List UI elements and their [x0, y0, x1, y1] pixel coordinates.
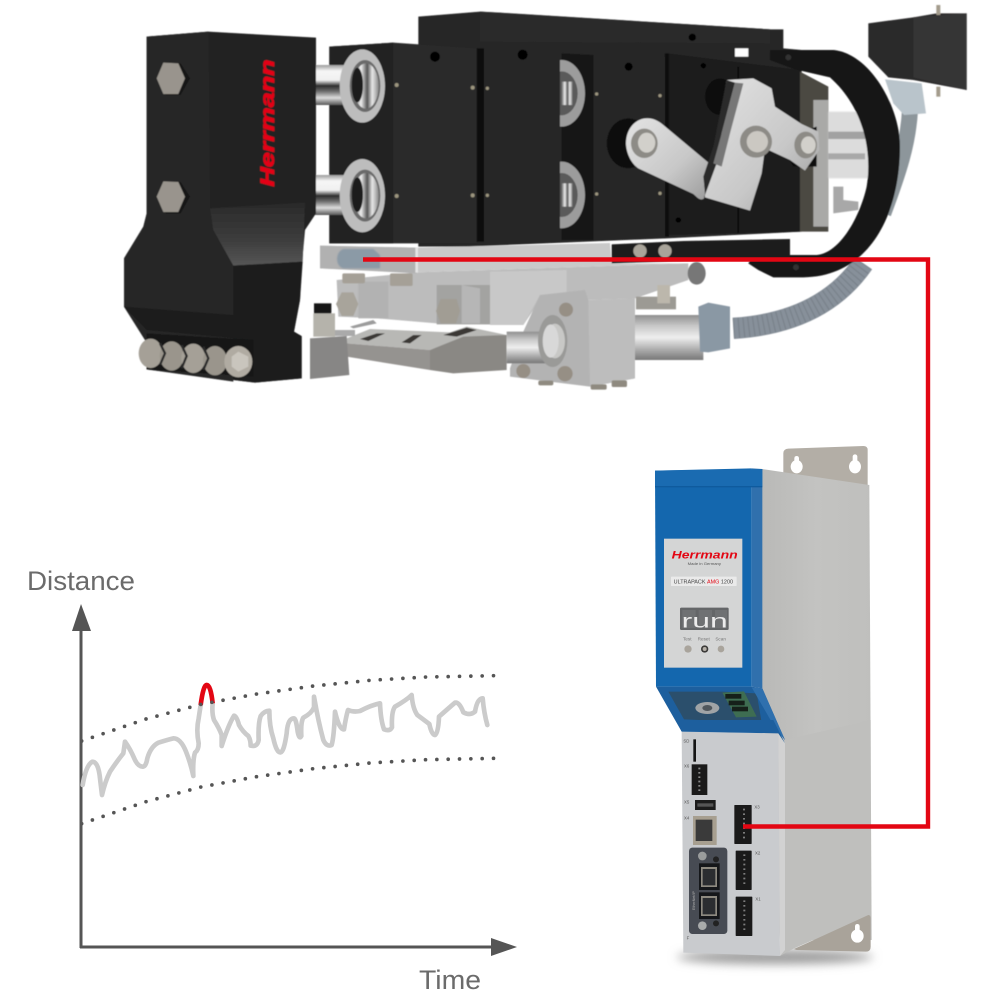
button labels: Test — [683, 637, 692, 642]
bottom bracket — [794, 915, 871, 952]
gray terminal block — [310, 336, 349, 379]
LED display: run — [682, 612, 728, 633]
connector housing — [868, 13, 967, 90]
X3 terminal — [734, 805, 752, 844]
lower tolerance limit — [82, 758, 494, 824]
shaft — [507, 332, 550, 363]
port labels: F — [687, 935, 690, 940]
hex bolts — [158, 63, 190, 95]
port labels — [683, 738, 761, 940]
x axis arrow — [80, 938, 517, 956]
X1 terminal — [736, 897, 752, 936]
top right gray hose — [883, 110, 910, 213]
port labels: X4 — [684, 815, 690, 820]
front mounting block — [124, 32, 316, 383]
blue front cover — [655, 468, 752, 687]
button labels: Scan — [715, 637, 726, 642]
slide assembly (silver) — [310, 239, 790, 390]
port labels: X2 — [755, 851, 761, 856]
clamp jaw — [347, 320, 507, 373]
port labels: X5 — [684, 799, 690, 804]
rear housing and blocks — [418, 5, 967, 328]
top plate — [320, 243, 688, 272]
arm bolts — [631, 129, 658, 158]
X4 Ethernet — [693, 816, 717, 845]
small bolts — [342, 273, 365, 283]
port labels: SD — [683, 738, 689, 743]
swing arm levers — [607, 118, 650, 168]
gray side panel — [762, 469, 872, 940]
key switch — [695, 702, 719, 714]
port labels: X6 — [684, 764, 690, 769]
floor shadow — [677, 950, 873, 964]
red signal line from sensor to controller — [363, 260, 928, 826]
hole in plate — [735, 48, 748, 57]
black cable carrier loop — [748, 50, 900, 277]
row of clamp bolts — [139, 333, 253, 377]
right flange block — [510, 290, 635, 387]
y axis arrow — [72, 604, 91, 948]
port labels: X3 — [754, 804, 760, 809]
controller unit: Ultrapack AMG 1200 — [655, 446, 873, 964]
center housing block — [124, 32, 560, 383]
blue slanted base — [656, 687, 785, 740]
push-in fitting — [314, 303, 331, 314]
X5 USB — [695, 800, 716, 810]
button labels — [683, 637, 726, 642]
model label: ULTRAPACK AMG 1200 — [674, 579, 733, 585]
sensor cylinder — [635, 315, 703, 360]
button labels: Reset — [698, 637, 711, 642]
lower controller section — [677, 720, 871, 956]
upper controller section — [655, 446, 872, 940]
lower corrugated hose — [733, 263, 863, 328]
made in: Made in Germany — [688, 561, 721, 566]
flange — [538, 315, 567, 367]
sensor head — [337, 249, 380, 268]
signal trace — [83, 695, 487, 795]
gray hose gland — [698, 303, 730, 352]
side hardware behind hose loop — [800, 72, 828, 232]
fieldbus module — [689, 848, 727, 934]
blue cover tip — [677, 720, 785, 743]
front label panel — [664, 539, 742, 668]
chrome guide rods — [315, 65, 357, 105]
black plate section — [612, 239, 790, 263]
X2 terminal — [736, 851, 752, 890]
brand logo: Herrmann — [672, 550, 738, 562]
chart: distance over time — [27, 566, 517, 995]
measurement curves — [82, 676, 494, 824]
buttons — [684, 645, 724, 653]
machine: sealing unit — [124, 5, 967, 390]
y axis label: Distance — [27, 566, 135, 596]
top mounting bracket — [783, 446, 868, 487]
green terminal connector — [722, 691, 757, 717]
gray side lower edge — [780, 720, 871, 956]
brand name on block: Herrmann — [258, 59, 279, 187]
front connector panel — [682, 732, 780, 956]
flange washers — [340, 49, 385, 232]
upper tolerance limit — [82, 676, 494, 741]
fieldbus module: EtherNet/IP — [692, 891, 696, 910]
X6 connector — [692, 764, 707, 795]
x axis label: Time — [419, 965, 481, 995]
lower aluminium body — [337, 263, 688, 325]
out-of-tolerance peak — [201, 685, 213, 705]
SD slot — [693, 739, 696, 762]
washers between blocks — [538, 60, 585, 127]
port labels: X1 — [755, 897, 761, 902]
